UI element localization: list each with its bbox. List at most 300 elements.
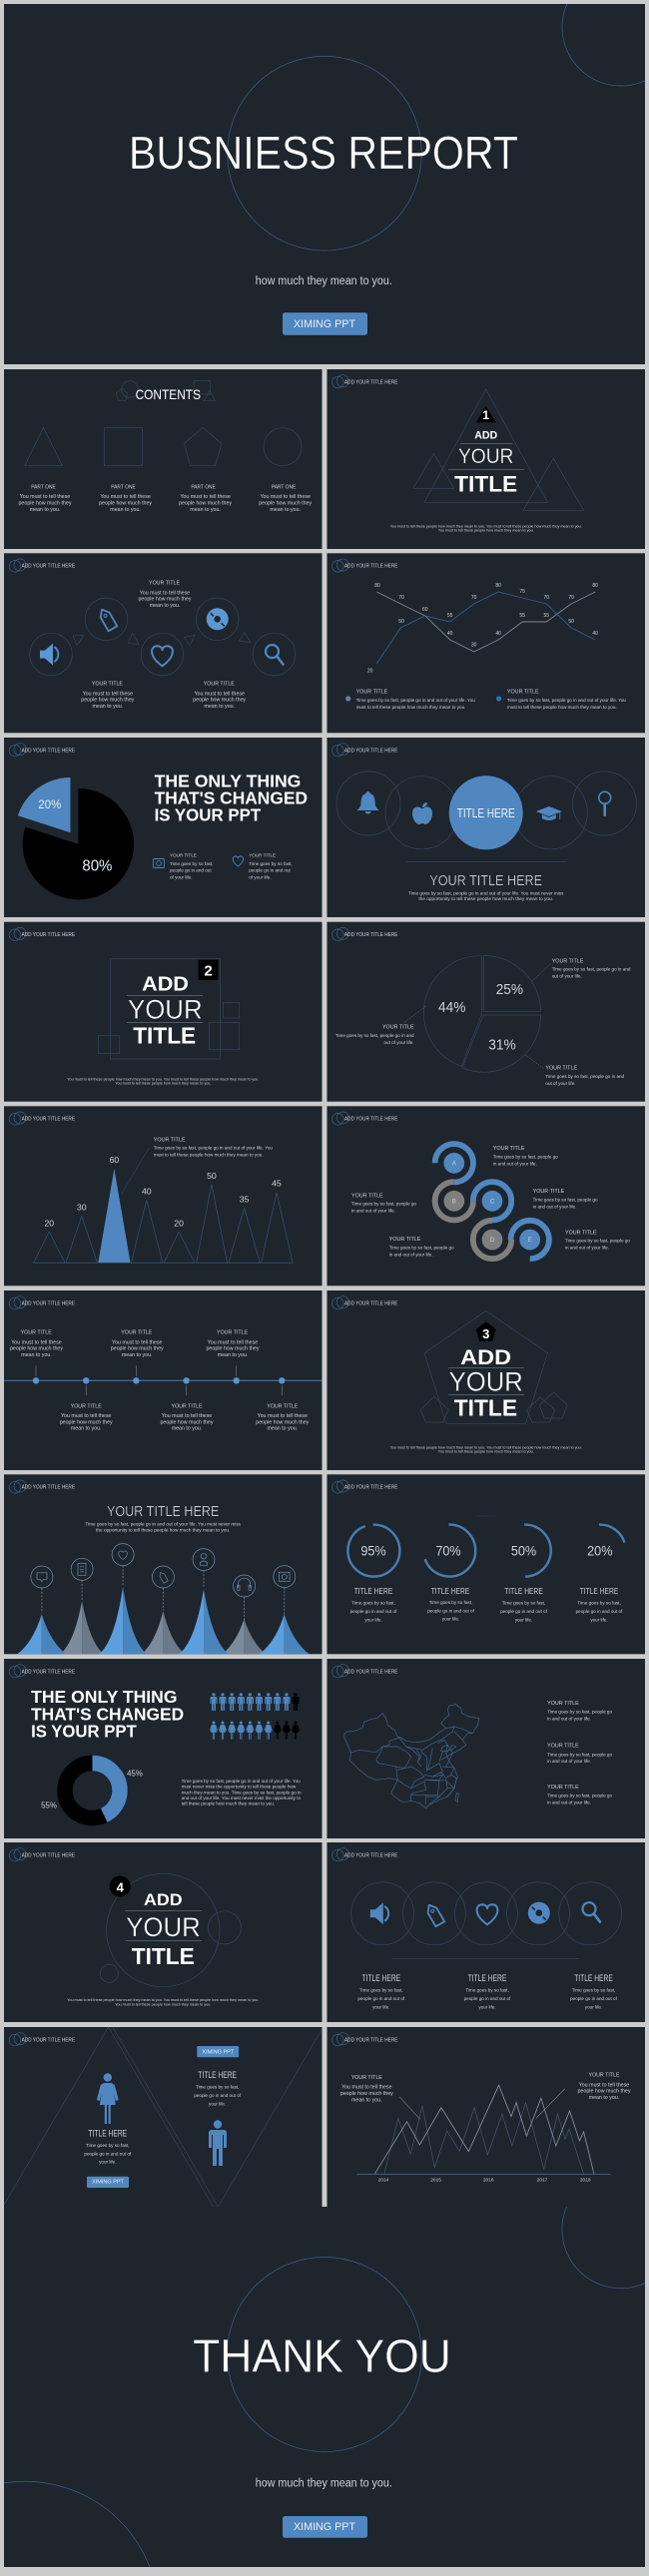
progress 50%: TITLE HERE [504,1586,543,1596]
section title: TITLE [132,1943,195,1969]
header [332,744,398,757]
item: camera: YOUR TITLE [170,853,197,858]
text: left [335,1025,414,1045]
panel: section 1 [327,369,645,549]
triangle chart: 35 [240,1195,250,1205]
text: milestone 1 [10,1330,63,1358]
text: part four: PART ONE [272,484,297,490]
item: camera [154,853,214,879]
text: milestone 1: You must to tell these [11,1339,62,1345]
diagonal frame lines [4,2027,322,2207]
line chart: 80 [374,583,380,589]
text: part one [18,484,72,513]
number badge [199,960,218,980]
item: camera: people go in and out [170,868,212,873]
header [9,1480,75,1493]
triangle chart [34,1155,293,1263]
text: part three: You must to tell these [180,494,231,500]
panel: map [327,1659,645,1838]
text: Time goes by so fast, people go in and out of your life. You [154,1146,273,1151]
text: right note: mean to you. [589,2095,619,2101]
text column 2: TITLE HERE [468,1973,506,1983]
progress 95%: 95% [360,1543,386,1558]
item: heart: of your life. [249,874,272,879]
panel: line chart [327,553,645,733]
text: milestone 3 [111,1330,164,1358]
line chart: 75 [519,589,525,595]
text: woman: TITLE HERE [89,2128,127,2138]
text: milestone 3: YOUR TITLE [121,1330,153,1336]
button: bottom [87,2177,129,2188]
text: top: You must to tell these [140,590,190,596]
line chart: 80 [592,583,598,589]
triangle chart: 20 [174,1219,184,1229]
text: top right: out of your life. [552,973,582,978]
header: ADD YOUR TITLE HERE [344,564,398,570]
number badge: 1 [482,408,489,422]
progress 50% [499,1525,551,1622]
header: ADD YOUR TITLE HERE [22,932,75,938]
text: part one: mean to you. [30,507,60,513]
heading: IS YOUR PPT [155,805,262,825]
spiral rings [435,1144,549,1259]
text: milestone 2 [60,1403,113,1432]
paragraph: much they mean to you. Time goes by so fast, people go in [182,1790,302,1795]
progress 70% [423,1525,475,1622]
header: ADD YOUR TITLE HERE [22,2037,75,2043]
item: camera: of your life. [170,874,192,879]
text: A: YOUR TITLE [493,1146,525,1152]
header [9,2033,75,2046]
text: milestone 6: people how much they [256,1419,310,1425]
panel: spiral rings [327,1106,645,1286]
icon: square [104,427,143,466]
header [332,1665,398,1678]
text: right note: YOUR TITLE [588,2073,620,2079]
panel: pie and heading [4,738,322,917]
text: right note [577,2073,631,2101]
text: man: people go in and out of [194,2093,242,2098]
map of China [344,1705,479,1808]
line chart: 40 [592,631,598,637]
text: second: Time goes by so fast, people go [547,1752,612,1757]
text: third [547,1785,612,1804]
text: right note: people how much they [577,2089,631,2095]
section title: ADD [144,1890,183,1909]
text: part three: mean to you. [190,507,221,513]
section title: YOUR [458,444,513,468]
text: bottom right: mean to you. [204,704,235,710]
text: D: Time goes by so fast, people go [389,1246,454,1251]
text: milestone 1: mean to you. [21,1352,52,1358]
ring discs with letters: E [528,1238,532,1244]
text: first: YOUR TITLE [547,1701,579,1707]
text: bottom left: You must to tell these [83,691,133,697]
text: woman: your life. [99,2160,116,2165]
header: ADD YOUR TITLE HERE [344,379,398,385]
heading and text: Time goes by so fast, people go in and out of your life. You must never miss [85,1522,242,1527]
progress 95%: your life. [364,1617,382,1622]
text: third: in and out of your life. [547,1800,591,1804]
heading and text: the opportunity to tell these people how much they mean to you. [418,896,553,901]
header [9,1848,75,1861]
legend: grey [345,690,475,710]
text: milestone 5 [206,1330,260,1358]
legend: grey: Time goes by so fast, people go in and out of your life. You [356,698,475,703]
timeline axis and dots [4,1365,322,1395]
progress 20%: people go in and out of [576,1609,623,1614]
text: milestone 2: YOUR TITLE [71,1403,102,1409]
legend: blue: YOUR TITLE [507,690,539,696]
header: ADD YOUR TITLE HERE [344,2037,398,2043]
button: XIMING PPT [294,318,355,330]
text column 1: your life. [372,2004,389,2009]
icon: apple [412,802,432,824]
text: first [547,1701,612,1721]
text: A [493,1146,558,1166]
progress 50%: your life. [515,1617,532,1622]
legend: grey: YOUR TITLE [356,690,388,696]
section title [448,1346,524,1420]
text: part two: You must to tell these [100,494,151,500]
pie values [438,982,523,1054]
axis years: 2014 [378,2178,389,2184]
text column 3: TITLE HERE [574,1973,613,1983]
button: XIMING PPT [294,2521,355,2533]
progress 95%: TITLE HERE [354,1586,393,1596]
text column 2 [464,1973,511,2009]
progress 95%: people go in and out of [350,1609,397,1614]
header [332,927,398,940]
text: milestone 6 [256,1403,310,1432]
text: part three: PART ONE [191,484,216,490]
header: ADD YOUR TITLE HERE [22,564,75,570]
icon: tag [424,1902,444,1926]
panel: closing slide [4,2207,645,2567]
text: part four [259,484,313,513]
panel: outline pie [327,922,645,1102]
icon: speaker [370,1902,388,1924]
donut chart: 55% [41,1801,57,1810]
triangle chart: 30 [77,1203,87,1213]
text: part four: people how much they [259,500,313,506]
panel: timeline [4,1290,322,1470]
text: part one: people how much they [18,500,72,506]
section title [448,430,524,496]
panel: cover slide [4,4,645,364]
text: milestone 4: mean to you. [172,1426,202,1432]
panel: icon process [4,553,322,733]
text: milestone 1: YOUR TITLE [21,1330,52,1336]
section title: YOUR [126,1912,201,1942]
header: ADD YOUR TITLE HERE [344,1117,398,1123]
text column 1: people go in and out of [357,1996,405,2001]
header [9,927,75,940]
text: bottom left [81,682,135,710]
icon: tag [98,607,117,631]
line chart: 70 [398,595,404,601]
item: heart: Time goes by so fast, [249,861,293,866]
text: milestone 2: You must to tell these [61,1413,111,1419]
ring discs with letters: D [490,1238,495,1244]
donut chart [41,1763,143,1818]
button [283,2516,367,2538]
icon: triangle [25,427,63,466]
peaks [17,1587,310,1654]
centre circle: TITLE HERE [457,806,515,820]
text: bottom right: YOUR TITLE [545,1066,577,1072]
squares [98,959,240,1059]
line chart: 70 [568,595,574,601]
header [332,2033,398,2046]
panel: five icons [327,1842,645,2022]
line chart: 50 [398,619,404,625]
text: bottom right: Time goes by so fast, people go in and [545,1074,625,1079]
triangle chart: 45 [272,1179,282,1189]
text column 2: people go in and out of [464,1996,511,2001]
heading and text: the opportunity to tell these people how much they mean to you. [96,1527,230,1532]
text: bottom left: mean to you. [92,704,123,710]
line chart: 20 [367,668,373,674]
pentagons [420,1310,567,1423]
icon glyphs [37,1551,290,1590]
text: first: Time goes by so fast, people go [547,1710,612,1715]
text column 1: TITLE HERE [361,1973,400,1983]
text column 3: Time goes by so fast, [572,1988,615,1993]
text: top: mean to you. [150,603,180,609]
text: top right: Time goes by so fast, people go in and [552,967,631,972]
text: D: in and out of your life. [389,1252,433,1257]
ring discs with letters: A [452,1161,456,1167]
text: left: out of your life. [383,1040,414,1045]
text: part three [179,484,232,513]
thank you title: THANK YOU [193,2329,451,2381]
text: A: in and out of your life. [493,1161,537,1166]
text: bottom left: YOUR TITLE [92,682,123,688]
heading and text [85,1504,242,1532]
text: top right [552,958,631,978]
ring outlines [351,1882,622,1945]
text: YOUR TITLE [154,1137,186,1143]
section title: TITLE [454,1394,517,1420]
panel: man and woman [4,2027,322,2207]
dashed stems [42,1566,285,1620]
heading and text [408,873,564,901]
line chart: 70 [544,595,549,601]
pie values: 31% [488,1038,516,1054]
header: ADD YOUR TITLE HERE [22,1300,75,1306]
pie chart: 80% [82,857,113,874]
subtitle: how much they mean to you. [256,275,392,287]
text: B [351,1193,416,1214]
text: right note: You must to tell these [579,2082,629,2088]
section title [127,974,203,1049]
progress 70%: 70% [435,1543,461,1558]
text [154,1137,273,1157]
text: C: Time goes by so fast, people go [533,1197,598,1202]
axis years: 2017 [537,2178,548,2184]
progress 20%: Time goes by so fast, [577,1601,621,1606]
text: milestone 3: mean to you. [122,1352,153,1358]
progress 20%: TITLE HERE [580,1586,619,1596]
line chart: 60 [422,607,428,613]
legend: blue [496,690,626,710]
line chart: 55 [544,613,549,619]
text: third: YOUR TITLE [547,1785,579,1791]
text: C [533,1189,598,1209]
legend: grey: must to tell these people how much they mean to you. [356,705,465,710]
axis years: 2015 [430,2178,441,2184]
decorative corner arc [562,4,645,86]
divider [392,1958,579,1960]
donut chart: 45% [127,1768,143,1778]
text: milestone 5: You must to tell these [208,1339,258,1345]
text: man [194,2070,242,2106]
pie chart: 20% [38,799,61,811]
section title: YOUR [449,1366,523,1396]
text: C: YOUR TITLE [533,1189,565,1195]
number badge: 2 [204,963,213,980]
dashed leaders [403,964,550,1069]
text: second: in and out of your life. [547,1759,591,1764]
header [332,559,398,572]
ring outlines [336,772,637,849]
caption: You must to tell these people how much they mean to you. [115,1082,211,1086]
icon circles [31,1544,296,1597]
icon: disc [207,608,229,630]
item: heart [233,853,293,879]
panel: section 3 [327,1290,645,1470]
icon: magnifier [599,791,611,816]
progress 95% [347,1525,399,1622]
caption: You must to tell these people how much they mean to you. You must to tell these people how much they mean to you. [390,1445,582,1449]
heading [31,1687,184,1741]
heading: CONTENTS [136,386,201,402]
text: bottom right [545,1066,625,1086]
text: milestone 4 [160,1403,214,1432]
pie values: 25% [496,982,523,998]
item: camera: Time goes by so fast, [170,861,214,866]
caption [67,1998,259,2007]
text: left note: people how much they [340,2091,393,2097]
text: second [547,1744,612,1764]
caption: You must to tell these people how much they mean to you. You must to tell these people how much they mean to you. [67,1998,259,2002]
text: left note [340,2075,393,2103]
paragraph: must never miss the opportunity to tell these people how [182,1785,297,1790]
paragraph: Time goes by so fast, people go in and out of your life. You [182,1779,301,1784]
title: BUSNIESS REPORT [129,127,518,179]
section title: YOUR [128,994,203,1024]
decorative shapes behind heading [116,381,216,401]
caption [390,1445,582,1454]
panel: people and donut [4,1659,322,1838]
progress 50%: 50% [511,1543,536,1558]
header [332,1480,398,1493]
section title: ADD [460,1346,511,1369]
text: top right: YOUR TITLE [552,958,584,964]
text: B: Time goes by so fast, people go [351,1202,416,1207]
text: third: Time goes by so fast, people go [547,1794,612,1799]
icon: man [209,2120,227,2166]
header: ADD YOUR TITLE HERE [22,748,75,754]
line chart: 40 [495,631,501,637]
panel: circles with icons [327,738,645,917]
line chart: 55 [447,613,453,619]
header [9,744,75,757]
progress 50%: Time goes by so fast, [502,1601,545,1606]
number badge [476,1321,496,1341]
heading and text: Time goes by so fast, people go in and out of your life. You must never miss [408,890,564,895]
caption: You must to tell these people how much they mean to you. You must to tell these people how much they mean to you. [390,524,582,528]
text: left: YOUR TITLE [382,1025,414,1031]
text: E: YOUR TITLE [565,1230,597,1236]
icon: search [583,1902,600,1922]
text: milestone 2: people how much they [60,1419,113,1425]
section title: TITLE [133,1023,196,1049]
panel: progress rings [327,1474,645,1654]
icon: graduation cap [536,806,562,820]
ring discs with letters: C [490,1199,495,1205]
axis years: 2018 [580,2178,591,2184]
legend: blue: must to tell these people how much they mean to you. [507,705,617,710]
progress 20%: your life. [590,1617,608,1622]
panel: triangle bar chart [4,1106,322,1286]
progress 70%: TITLE HERE [431,1586,470,1596]
text: bottom right [193,682,247,710]
text: woman: Time goes by so fast, [86,2143,130,2148]
centre circle [449,775,523,849]
panel: section 2 [4,922,322,1102]
zigzag chart [356,2085,611,2174]
number badge: 4 [117,1880,125,1895]
text: first: in and out of your life. [547,1716,591,1721]
pie segments [423,955,541,1072]
header: ADD YOUR TITLE HERE [344,1852,398,1858]
header [332,1296,398,1309]
text: top: people how much they [138,597,192,603]
section title [126,1890,202,1969]
text: top: YOUR TITLE [149,581,181,587]
axis years: 2016 [483,2178,494,2184]
icon: woman [97,2073,119,2124]
progress 20%: 20% [587,1543,612,1558]
axis years [378,2178,591,2184]
text column 2: your life. [478,2004,496,2009]
text: milestone 6: YOUR TITLE [267,1403,299,1409]
text: milestone 4: people how much they [160,1419,214,1425]
panel: contents [4,369,322,549]
text: must to tell these people how much they mean to you. [154,1152,264,1157]
decorative large circle [228,2258,421,2451]
heading: IS YOUR PPT [31,1721,137,1741]
text: E: in and out of your life. [565,1246,609,1251]
legend: blue: Time goes by so fast, people go in and out of your life. You [507,698,626,703]
text: part one: You must to tell these [20,494,70,500]
progress 20% [574,1525,626,1622]
icon: disc [528,1902,550,1924]
triangle chart: 20 [44,1219,54,1229]
icon: heart [477,1904,497,1924]
text: left note: You must to tell these [341,2084,392,2090]
subtitle: how much they mean to you. [256,2478,392,2490]
number badge: 3 [482,1326,489,1341]
progress 70%: people go in and out of [427,1608,475,1613]
text: part three: people how much they [179,500,232,506]
text: milestone 2: mean to you. [71,1426,102,1432]
text: woman [84,2128,132,2165]
button: top [197,2046,239,2057]
triangle chart: 40 [142,1187,152,1197]
